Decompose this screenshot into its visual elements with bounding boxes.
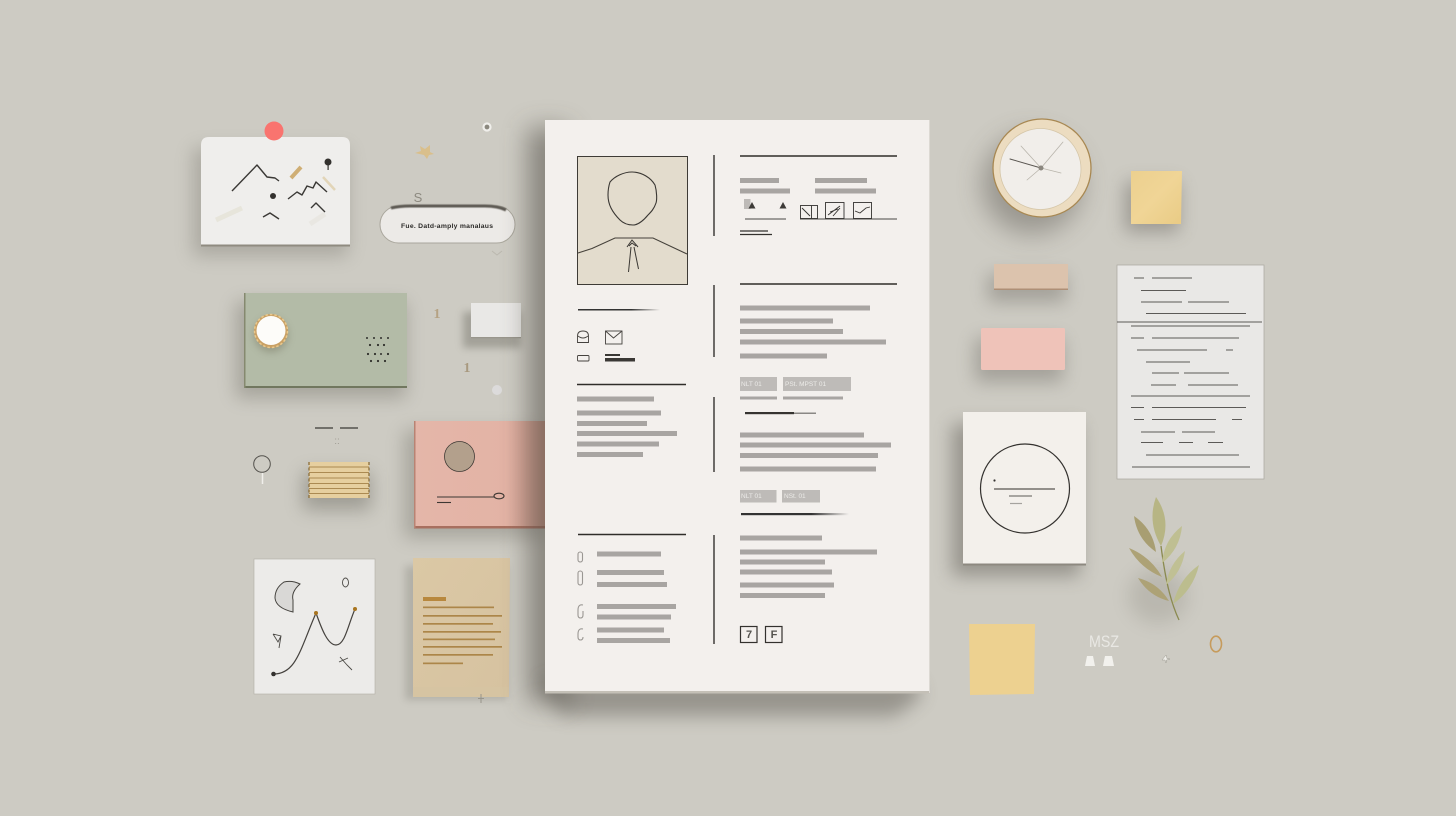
- panel: left note card: [193, 122, 350, 256]
- icon: plus: [478, 694, 484, 703]
- paper lines: [1117, 278, 1262, 467]
- sketch: small marks: [216, 158, 335, 224]
- job heading 1: PSt. MPST 01: [785, 381, 826, 388]
- yellow note small: [1125, 171, 1182, 232]
- left text block: [577, 396, 677, 457]
- icon: ring top: [484, 124, 490, 130]
- numeral marks: [434, 307, 470, 376]
- seal: white round button: [254, 314, 288, 352]
- sketch: mountain lines: [232, 165, 327, 219]
- text lines: [423, 606, 502, 664]
- panel: resume sheet: [528, 120, 930, 716]
- chart boxes: [800, 202, 872, 218]
- dashes: ::: [334, 436, 340, 447]
- icon: small star: [1162, 655, 1170, 663]
- dashes: [315, 428, 358, 447]
- head: [608, 172, 657, 225]
- icon: gold ring: [1210, 636, 1222, 652]
- icon: wall clock: [982, 119, 1091, 234]
- contact icons: [578, 331, 622, 361]
- circle: [444, 442, 474, 472]
- panel: tan sheet: [405, 558, 510, 700]
- column dividers: [713, 155, 715, 644]
- job heading 2: [740, 490, 849, 515]
- panel: white circle card: [952, 412, 1086, 576]
- tan block: [988, 264, 1068, 302]
- tie: [627, 240, 638, 272]
- section headings rules: [577, 156, 897, 534]
- pin: coral: [264, 122, 284, 140]
- dots grid: [366, 337, 389, 362]
- top right block: [740, 178, 897, 234]
- pink block: [975, 328, 1065, 382]
- icon: s hook: S: [414, 190, 423, 205]
- panel: pink card: [404, 421, 545, 538]
- experience block: [740, 306, 886, 358]
- circle diagram: [980, 444, 1070, 533]
- small marks: [273, 578, 352, 670]
- job text 2: [740, 536, 877, 598]
- small white label: MSZ: [1089, 632, 1119, 651]
- pill label: [380, 190, 515, 243]
- slider line: [437, 493, 504, 502]
- left list: [578, 552, 676, 643]
- badge icons: F: [771, 629, 778, 641]
- list icons: [578, 552, 583, 640]
- curve chart: [271, 607, 357, 676]
- name line: [578, 309, 660, 310]
- icon: chevron: [492, 251, 502, 255]
- heading bar: [423, 597, 446, 601]
- wood stack: [303, 462, 371, 510]
- job heading 1: [740, 377, 851, 414]
- shoulders: [578, 238, 687, 254]
- badge icons: [740, 626, 782, 642]
- numeral marks: 1: [464, 361, 470, 376]
- icon: grey dot: [492, 385, 502, 395]
- icon: gold star: [415, 145, 434, 159]
- job text 1: [740, 432, 891, 472]
- job heading 1: NLT 01: [741, 381, 762, 388]
- job heading 2: NLT 01: [741, 493, 762, 500]
- badge icons: 7: [746, 629, 752, 641]
- photo: [578, 156, 688, 284]
- pill text: Fue. Datd-amply manalaus: [401, 223, 493, 230]
- contact lines: [605, 354, 635, 362]
- panel: white sketch card: [254, 559, 375, 694]
- icon: leaf sprig: [1128, 497, 1199, 624]
- clock hands: [1010, 142, 1063, 180]
- panel: sage card: [236, 293, 407, 398]
- panel: small white card: [463, 303, 521, 348]
- small white label: [1085, 632, 1119, 666]
- crescent: [275, 581, 300, 612]
- yellow note large: [969, 624, 1035, 695]
- icon: ring and hook: [254, 456, 270, 484]
- panel: lined paper: [1117, 265, 1264, 479]
- job heading 2: NSt. 01: [784, 493, 806, 500]
- numeral marks: 1: [434, 307, 440, 322]
